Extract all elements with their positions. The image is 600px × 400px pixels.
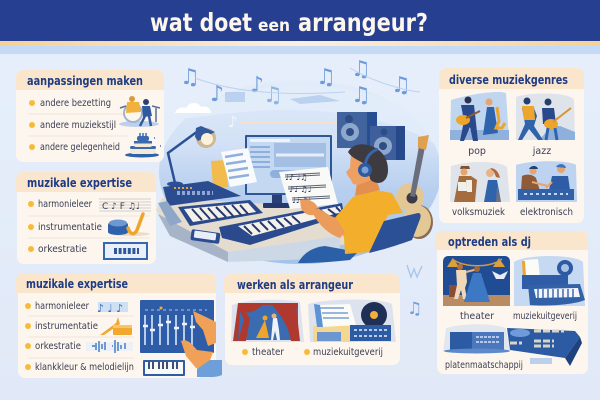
decorative note near bottom centre (407, 265, 422, 319)
labels: muziekuitgeverij (313, 347, 383, 358)
left paper and folder (211, 148, 257, 187)
image: jazz (516, 94, 575, 140)
musical notes: ♫ (391, 73, 411, 98)
image: pop (450, 92, 509, 141)
image: music publisher (514, 256, 585, 306)
header banner (0, 0, 600, 54)
sheet music in hand: ♪♩ ♫♩ (289, 185, 311, 194)
label: theater: theater (460, 311, 494, 322)
title: arrangeur? (298, 8, 428, 37)
list: harmonieleer (38, 199, 92, 210)
keyboard (143, 360, 185, 376)
arm (312, 208, 345, 238)
speakers (337, 112, 405, 160)
heading: aanpassingen maken (27, 74, 143, 88)
panel: diverse muziekgenres (439, 68, 584, 223)
musical notes: ♫ (316, 65, 336, 90)
icon: sound wave (86, 340, 133, 353)
icon: sheet notes: ♪ ♩ ♪ (97, 302, 123, 315)
headphones (365, 149, 378, 168)
decorative note near bottom centre: ♫ (407, 299, 422, 319)
central illustration: arranger in studio (156, 57, 441, 264)
icon: drum and saxophone (108, 214, 150, 236)
panel: muzikale expertise (top) (16, 172, 156, 264)
icon: staff notation: C ♪ F ♫♩ (102, 202, 140, 212)
musical notes: ♪ (250, 73, 264, 98)
heading: muzikale expertise (26, 277, 128, 291)
chair (369, 213, 421, 253)
sheet music in hand (279, 167, 338, 209)
title: wat doet (150, 8, 252, 37)
list (29, 98, 120, 153)
image: theater stage (231, 300, 304, 342)
icon: cake (125, 133, 161, 158)
image: volksmuziek (450, 162, 510, 202)
sheet music in hand: ♩♪ ♩♫ (285, 173, 307, 182)
panel: optreden als dj (435, 231, 588, 374)
list: andere bezetting (40, 98, 111, 109)
icon: horn and drum (100, 317, 132, 335)
label: volksmuziek: volksmuziek (452, 207, 505, 218)
list: instrumentatie (38, 222, 102, 233)
label: jazz: jazz (532, 146, 551, 157)
sheet music in hand: ♩♩ ♪♩ (292, 196, 311, 205)
mixing console (140, 300, 214, 353)
list (28, 199, 102, 255)
guitar (396, 135, 433, 239)
list: harmonieleer (35, 301, 89, 312)
image: mixer device (507, 328, 582, 366)
neck and face (355, 176, 380, 196)
image: publisher desk (308, 300, 396, 342)
label: pop: pop (468, 146, 486, 157)
centre keyboard (219, 203, 344, 245)
hands (181, 311, 222, 377)
musician (279, 144, 403, 263)
musical notes: ♫ (351, 57, 371, 82)
heading: werken als arrangeur (237, 278, 353, 292)
heading: optreden als dj (448, 235, 531, 249)
image: record label building (443, 324, 510, 354)
icon: score box (103, 242, 148, 260)
icon: musicians (119, 96, 160, 127)
hair (348, 144, 388, 183)
panel: aanpassingen maken (16, 70, 164, 162)
musical notes: ♫ (351, 83, 371, 108)
heading: muzikale expertise (27, 176, 132, 190)
list: andere muziekstijl (40, 120, 116, 131)
label: platenmaatschappij: platenmaatschappij (445, 360, 523, 371)
image: theater (443, 256, 510, 306)
list: orkestratie (38, 244, 87, 255)
list: instrumentatie (35, 321, 98, 332)
synthesizer and left keyboard (158, 181, 263, 244)
labels (242, 347, 383, 358)
monitor (245, 135, 332, 208)
title: een (258, 16, 290, 36)
desk lamp (167, 126, 216, 186)
label: elektronisch: elektronisch (520, 207, 573, 218)
heading: diverse muziekgenres (449, 73, 568, 87)
image: elektronisch (516, 161, 577, 202)
musical notes (180, 57, 420, 131)
musical notes: ♪ (210, 82, 224, 107)
labels: theater (252, 347, 284, 358)
musical notes: ♫ (180, 65, 200, 90)
title (150, 8, 428, 37)
list: orkestratie (35, 341, 81, 352)
panel: werken als arrangeur (224, 274, 400, 365)
scene background (159, 80, 441, 264)
list: klankkleur & melodielijn (35, 362, 134, 373)
desk (156, 198, 380, 262)
shirt (333, 190, 403, 254)
musical notes: ♪ (228, 113, 238, 131)
list (25, 301, 134, 373)
panel: muzikale expertise (bottom) (16, 273, 222, 378)
list: andere gelegenheid (40, 142, 120, 153)
musical notes: ♫ (263, 83, 283, 108)
label: muziekuitgeverij: muziekuitgeverij (513, 311, 577, 322)
